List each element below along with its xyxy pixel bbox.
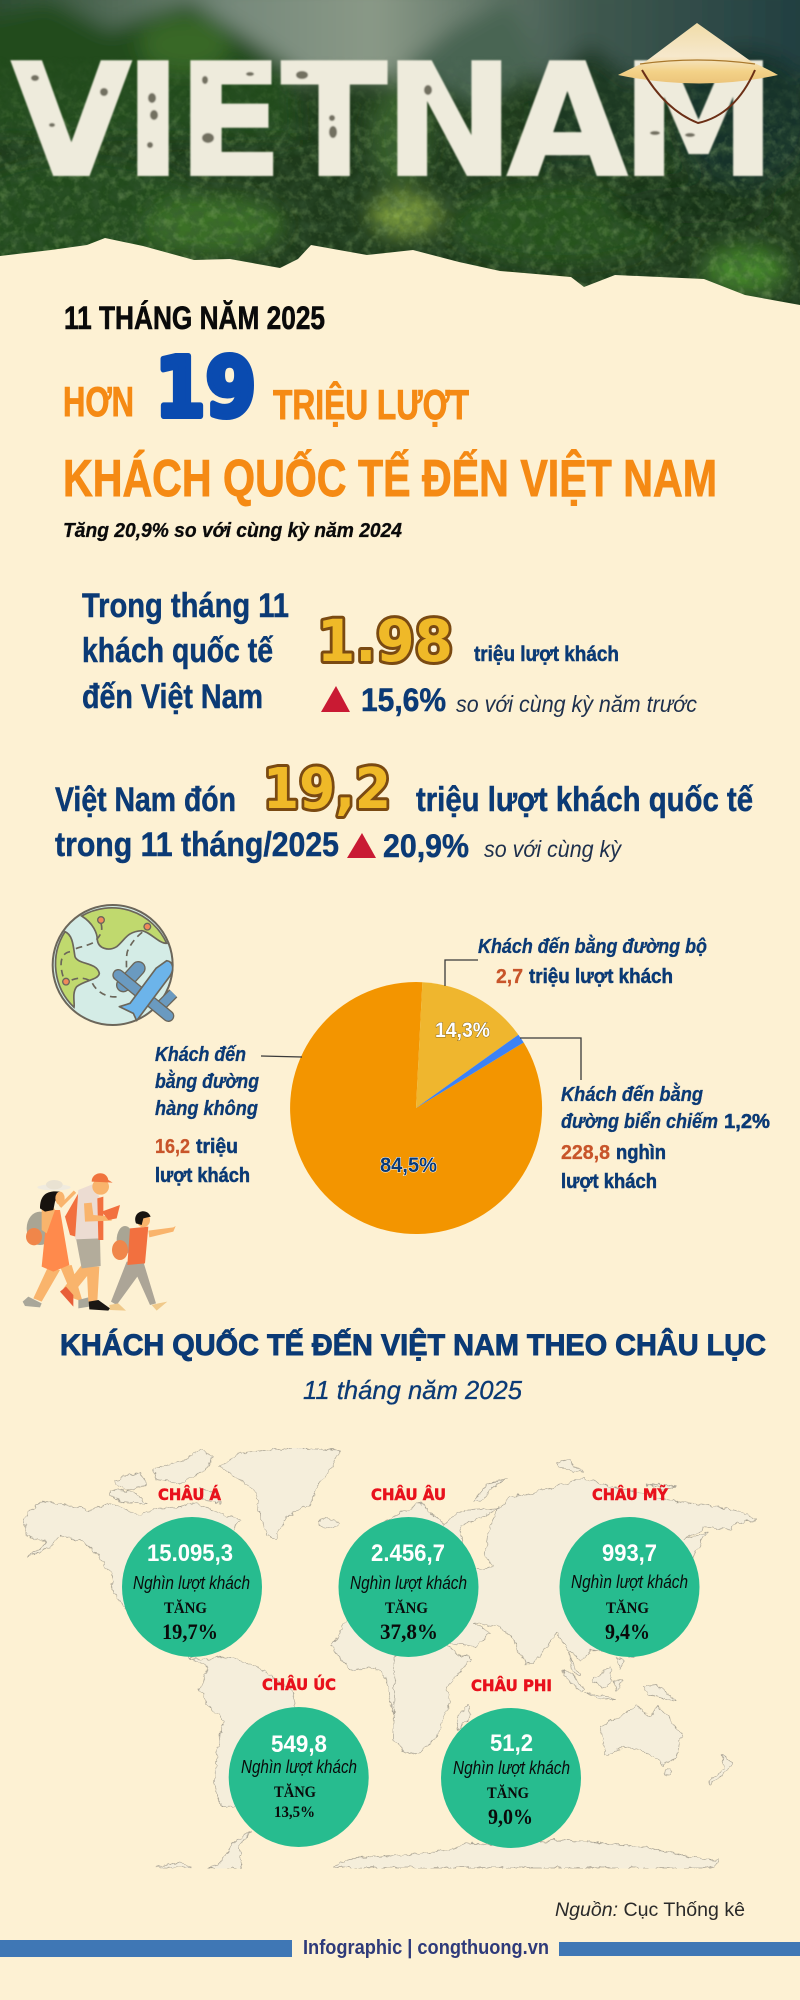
- section heading: by continent: KHÁCH QUỐC TẾ ĐẾN VIỆT NAM THEO CHÂU LỤC: [60, 1328, 766, 1362]
- subhead: Tăng 20,9% so với cùng kỳ năm 2024: [63, 520, 402, 542]
- leader line: road: [445, 960, 478, 986]
- unit: triệu lượt khách: [474, 643, 619, 666]
- comparison note: so với cùng kỳ năm trước: [456, 691, 697, 717]
- stat block: November: [82, 587, 697, 718]
- continent card: America: 993,7: [602, 1540, 657, 1567]
- text before number: Việt Nam đón: [55, 781, 236, 819]
- continent card: Europe: [338, 1485, 478, 1657]
- header photo: Vietnam landscape: [0, 0, 800, 310]
- headline line 1: word before number: HƠN: [63, 378, 134, 425]
- date line: 11 THÁNG NĂM 2025: [64, 300, 325, 336]
- continent card: Asia: 19,7%: [162, 1619, 218, 1644]
- label: sea arrivals: lượt khách: [561, 1171, 657, 1193]
- label: road arrivals: 2,7: [496, 966, 523, 988]
- continent card: America: TĂNG: [606, 1600, 649, 1617]
- growth 15,6%: 15,6%: [361, 682, 446, 718]
- continent card: America: 9,4%: [605, 1619, 650, 1644]
- heading block: [63, 300, 717, 542]
- label: sea arrivals: [561, 1083, 770, 1193]
- man: [60, 1173, 120, 1311]
- slice: sea 1,2%: [416, 1035, 524, 1108]
- label: sea arrivals: 1,2%: [724, 1111, 770, 1133]
- November label: khách quốc tế: [82, 632, 273, 670]
- continent card: Europe: 37,8%: [380, 1619, 438, 1644]
- label: road arrivals: Khách đến bằng đường bộ: [478, 935, 707, 958]
- label: air arrivals: bằng đường: [155, 1070, 259, 1093]
- November label: [82, 587, 289, 716]
- leader line: sea: [520, 1038, 581, 1080]
- continent card: America: Nghìn lượt khách: [571, 1572, 688, 1592]
- continent card: Oceania: TĂNG: [274, 1784, 316, 1801]
- icon: conical hat on the M: [618, 23, 778, 123]
- label: air arrivals: Khách đến: [155, 1044, 246, 1066]
- continent card: America: [560, 1485, 700, 1657]
- western hemisphere: [23, 1448, 433, 1868]
- label: sea arrivals: đường biển chiếm: [561, 1111, 718, 1133]
- section heading: by continent: [60, 1328, 766, 1405]
- icon: up triangle: [321, 686, 350, 712]
- continent card: Africa: CHÂU PHI: [471, 1676, 552, 1695]
- label: air arrivals: [155, 1044, 259, 1187]
- section subheading: 11 tháng năm 2025: [303, 1375, 523, 1405]
- stat block: 11 months: [55, 757, 753, 864]
- continent card: Africa: TĂNG: [487, 1785, 529, 1802]
- Antarctica: [333, 1840, 717, 1868]
- footer bar: Infographic | congthuong.vn: [303, 1937, 549, 1959]
- source note: Nguồn: Cục Thống kê: [555, 1900, 745, 1921]
- continent card: Asia: [122, 1485, 262, 1657]
- torn paper edge: [0, 238, 800, 320]
- continent card: Asia: Nghìn lượt khách: [133, 1573, 250, 1593]
- November label: Trong tháng 11: [82, 587, 289, 625]
- continent card: Oceania: Nghìn lượt khách: [241, 1757, 357, 1777]
- headline line 1: word after number: TRIỆU LƯỢT: [273, 380, 469, 428]
- continent card: Africa: Nghìn lượt khách: [453, 1758, 570, 1778]
- continent card: Europe: CHÂU ÂU: [371, 1485, 446, 1504]
- label: sea arrivals: 228,8: [561, 1142, 610, 1164]
- continent card: Europe: Nghìn lượt khách: [350, 1573, 467, 1593]
- label: sea arrivals: nghìn: [616, 1142, 666, 1164]
- continent card: Oceania: 549,8: [271, 1731, 327, 1758]
- leader line: air: [261, 1056, 302, 1057]
- illustration: travelling family: [23, 1173, 176, 1311]
- slice: road 14,3%: [416, 982, 518, 1108]
- continent card: Europe: TĂNG: [385, 1600, 428, 1617]
- continent card: Africa: 9,0%: [488, 1804, 533, 1829]
- label: road arrivals: [478, 935, 707, 988]
- comparison note: so với cùng kỳ: [484, 836, 622, 862]
- number 1.98: 1.98: [317, 607, 453, 675]
- continent card: Oceania: [229, 1675, 369, 1847]
- label: air arrivals: lượt khách: [155, 1165, 250, 1187]
- value 84,5%: 84,5%: [380, 1154, 437, 1177]
- continent card: Africa: 51,2: [490, 1730, 533, 1757]
- label: road arrivals: triệu lượt khách: [529, 966, 673, 988]
- label: air arrivals: triệu: [196, 1136, 238, 1158]
- icon: up triangle: [347, 833, 376, 858]
- header word: VIETNAM: VIETNAM: [11, 30, 776, 212]
- number 19,2: 19,2: [263, 757, 391, 822]
- icon: globe with plane: [53, 905, 173, 1025]
- eastern hemisphere: [380, 1460, 757, 1784]
- continent card: Asia: CHÂU Á: [158, 1485, 222, 1504]
- slice: air 84,5%: [290, 982, 542, 1234]
- label: air arrivals: hàng không: [155, 1098, 258, 1120]
- continent card: Europe: 2.456,7: [371, 1540, 445, 1567]
- value 14,3%: 14,3%: [435, 1019, 490, 1042]
- world map: [23, 1448, 757, 1868]
- continent card: America: CHÂU MỸ: [592, 1485, 668, 1504]
- continent card: Asia: 15.095,3: [147, 1540, 233, 1567]
- November label: đến Việt Nam: [82, 678, 263, 716]
- label: sea arrivals: Khách đến bằng: [561, 1083, 703, 1106]
- woman: [23, 1180, 89, 1308]
- footer bar: [0, 1937, 800, 1959]
- period: trong 11 tháng/2025: [55, 826, 339, 864]
- growth 20,9%: 20,9%: [383, 828, 469, 864]
- text after number: triệu lượt khách quốc tế: [416, 781, 753, 819]
- continent card: Asia: TĂNG: [164, 1600, 207, 1617]
- continent card: Africa: [441, 1676, 581, 1848]
- pie chart: arrivals by transport: [290, 982, 542, 1234]
- label: air arrivals: 16,2: [155, 1136, 190, 1158]
- headline number 19: 19: [155, 341, 256, 436]
- continent card: Oceania: CHÂU ÚC: [262, 1675, 336, 1694]
- child: [109, 1211, 176, 1311]
- continent card: Oceania: 13,5%: [274, 1804, 315, 1821]
